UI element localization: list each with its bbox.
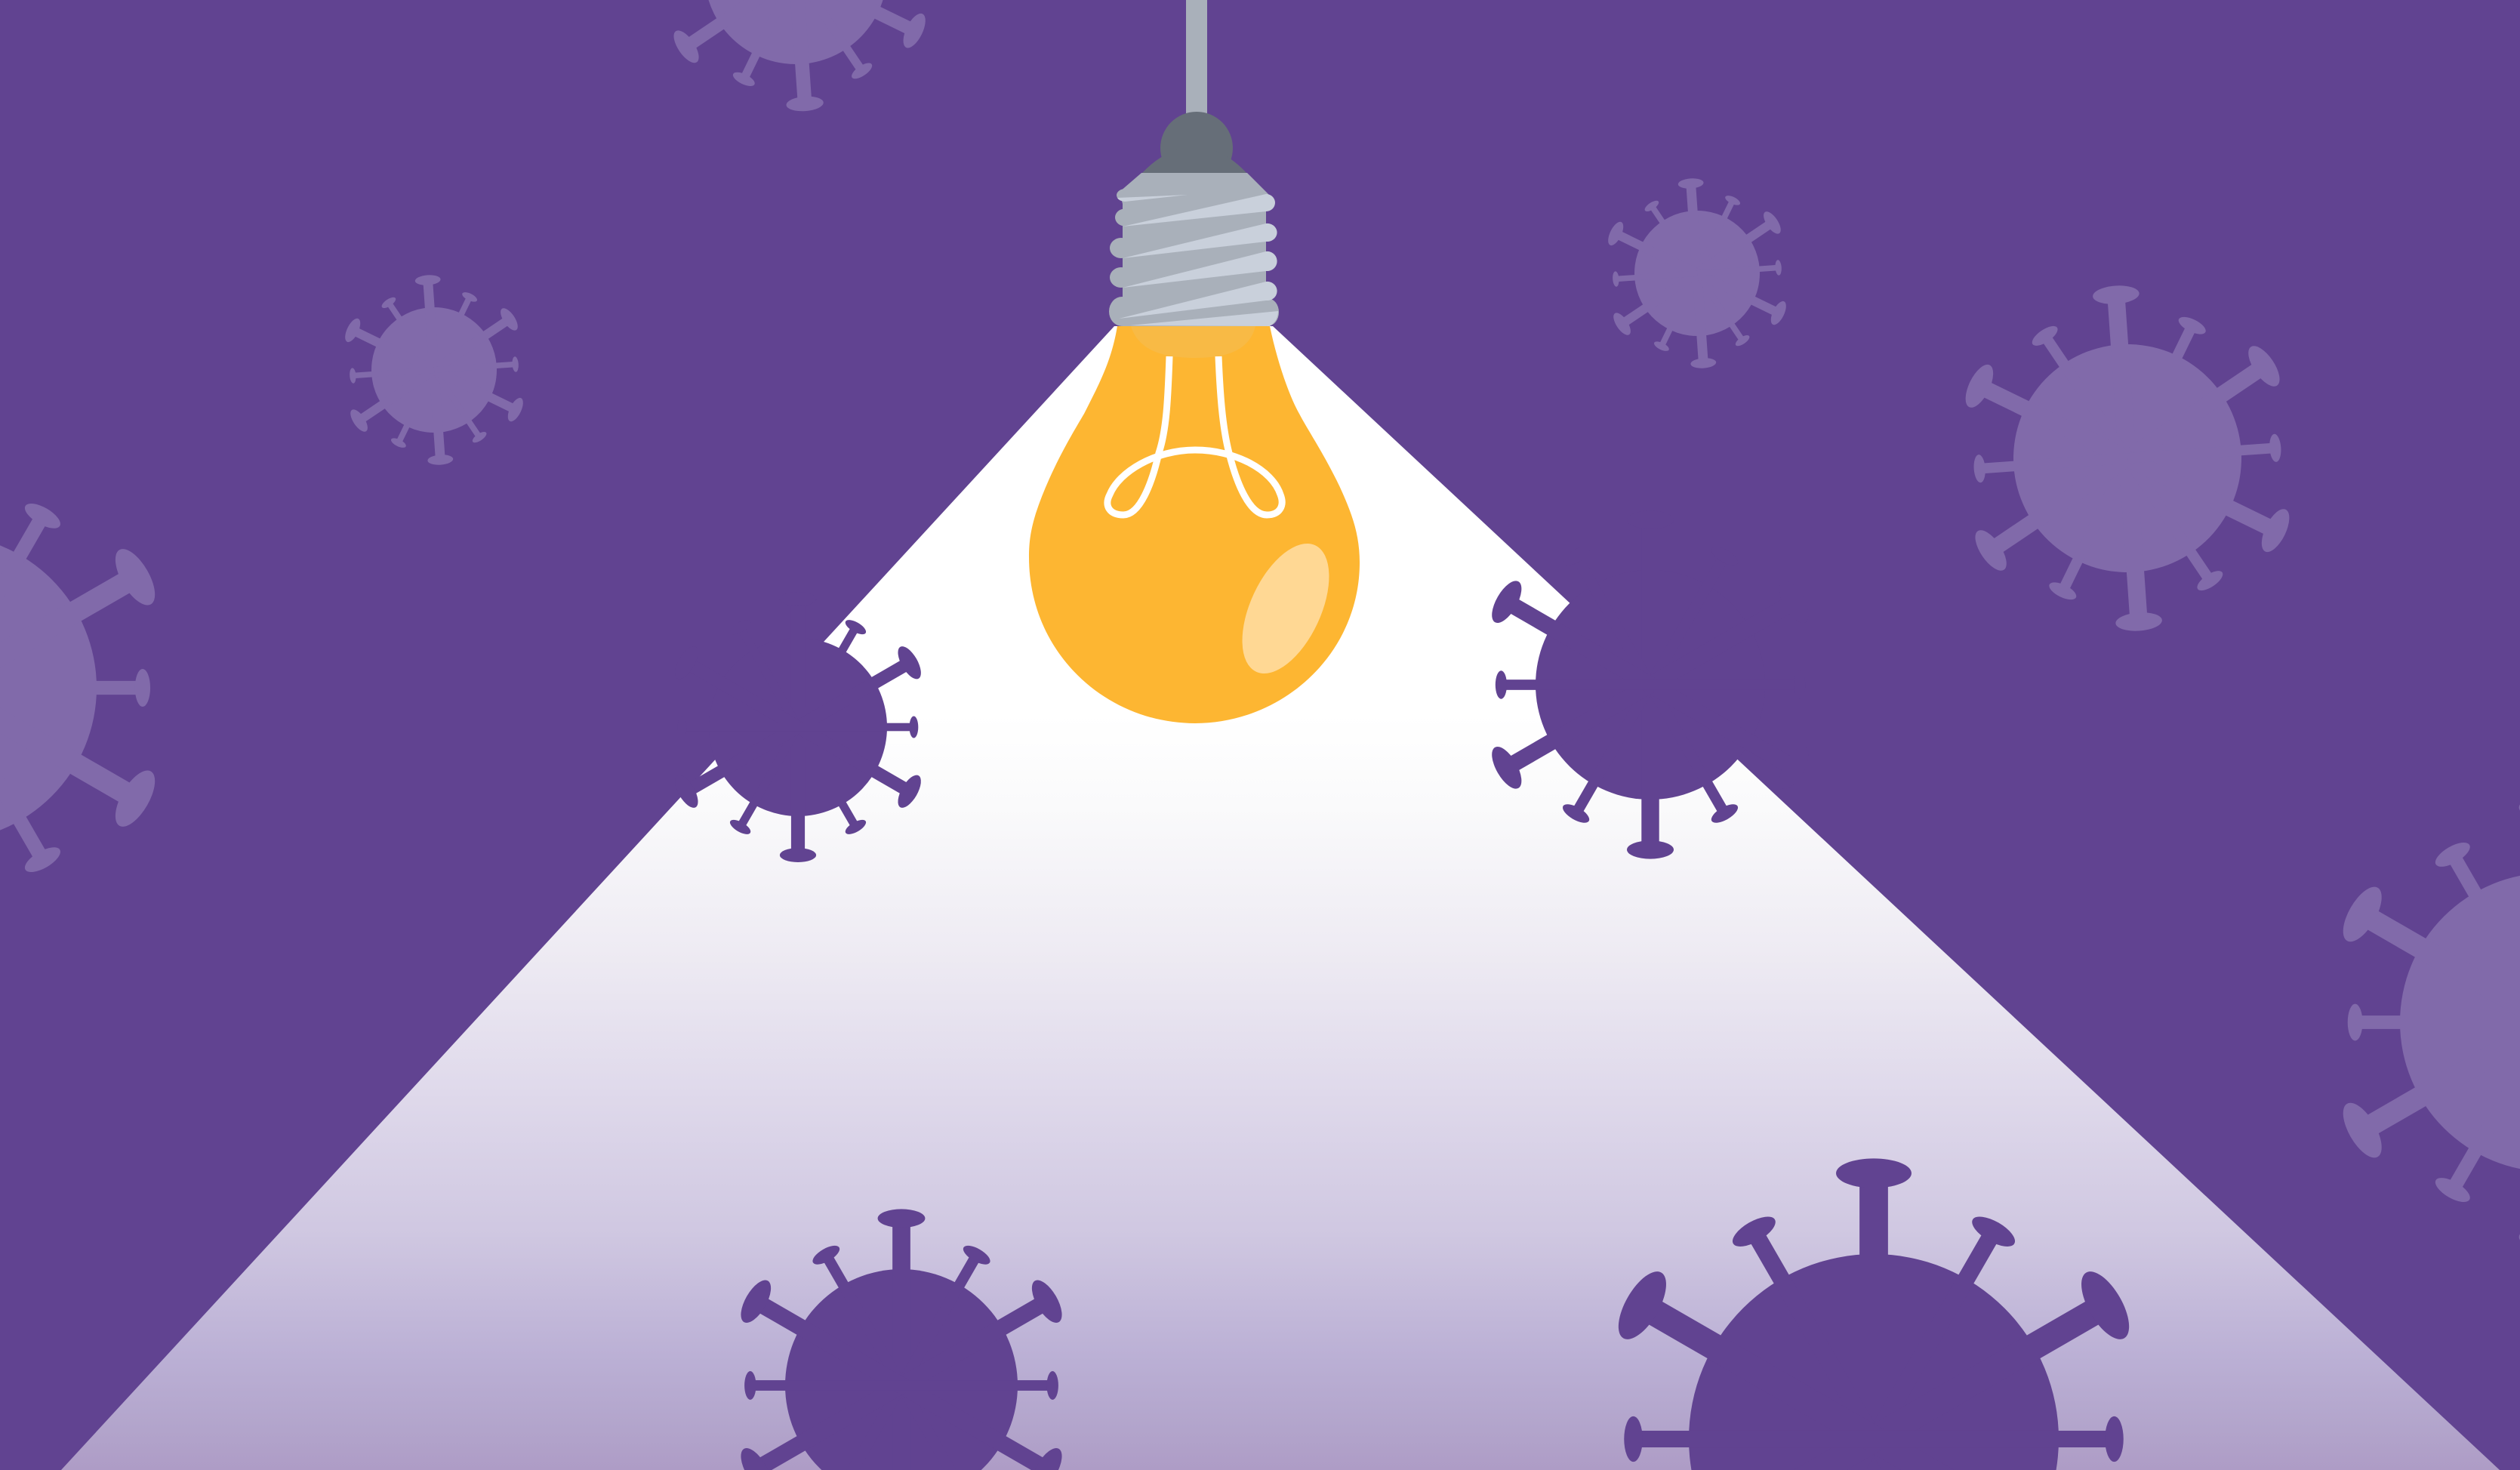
socket cap: [1141, 112, 1247, 184]
filament: [1108, 356, 1282, 515]
virus: mid right on beam edge: [1486, 510, 1815, 859]
bulb neck shade: [1131, 326, 1255, 358]
virus: upper left small: [338, 269, 530, 471]
screw base: [1109, 173, 1279, 326]
virus: bottom right large: [1609, 1158, 2139, 1470]
lit viruses: [670, 510, 2139, 1470]
highlight: [1225, 531, 1347, 686]
light beam: [61, 326, 2500, 1470]
virus: left edge: [0, 455, 163, 920]
glass bulb: [1029, 326, 1360, 723]
cord: [1186, 0, 1207, 117]
virus: upper right small: [1601, 172, 1793, 374]
light bulb: [1029, 0, 1360, 723]
virus: mid left on beam edge: [670, 592, 926, 862]
virus: bottom centre: [735, 1209, 1068, 1470]
virus: right edge: [2335, 796, 2520, 1249]
virus: top left, cropped by top edge: [655, 0, 936, 120]
virus: upper right large: [1952, 274, 2303, 643]
